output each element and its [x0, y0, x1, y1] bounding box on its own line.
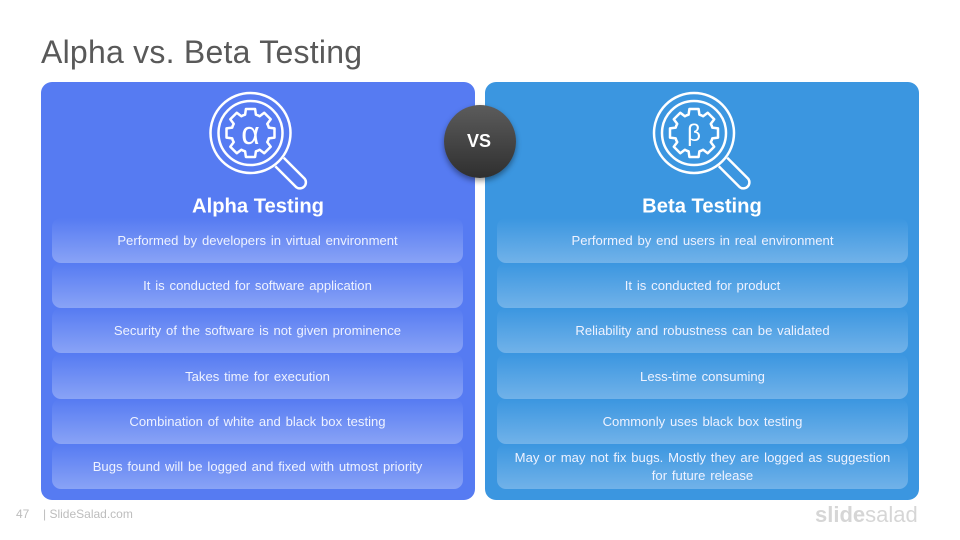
row 1 [497, 218, 908, 263]
icon: magnifier with alpha gear [209, 92, 308, 190]
row 6: May or may not fix bugs. Mostly they are logged as suggestion [515, 450, 890, 464]
icon: magnifier with alpha gear: α [241, 115, 260, 151]
row 4 [497, 354, 908, 399]
icon: magnifier with beta gear [652, 92, 751, 190]
row 2: It is conducted for software application [143, 278, 372, 292]
row 6 [497, 444, 908, 489]
row 1: Performed by end users in real environment [572, 232, 833, 248]
row 2 [497, 263, 908, 308]
row 2: It is conducted for product [625, 278, 780, 292]
row 6: for future release [652, 468, 753, 482]
title: Alpha vs. Beta Testing [41, 34, 362, 70]
row 5: Combination of white and black box testing [129, 414, 386, 428]
row 1 [52, 218, 463, 263]
row 3 [497, 308, 908, 353]
vs badge: VS [467, 131, 491, 151]
page number: 47 [16, 507, 29, 521]
row 4: Takes time for execution [185, 368, 330, 384]
footer site name: | SlideSalad.com [43, 507, 133, 521]
row 5 [497, 399, 908, 444]
row 4 [52, 354, 463, 399]
heading: beta testing: Beta Testing [642, 196, 762, 218]
row 6: Bugs found will be logged and fixed with utmost priority [93, 458, 422, 474]
row 5: Commonly uses black box testing [603, 414, 802, 428]
panel: alpha testing [41, 82, 475, 500]
row 5 [52, 399, 463, 444]
logo: slidesalad: slidesalad [815, 502, 918, 527]
row 6 [52, 444, 463, 489]
row 3: Reliability and robustness can be validated [575, 322, 830, 338]
vs badge [444, 105, 516, 178]
row 4: Less-time consuming [640, 368, 765, 384]
panel: beta testing [485, 82, 919, 500]
heading: alpha testing: Alpha Testing [192, 196, 324, 218]
icon: magnifier with beta gear: β [687, 120, 701, 147]
row 3 [52, 308, 463, 353]
row 1: Performed by developers in virtual environment [117, 232, 398, 248]
row 3: Security of the software is not given prominence [114, 322, 401, 338]
row 2 [52, 263, 463, 308]
